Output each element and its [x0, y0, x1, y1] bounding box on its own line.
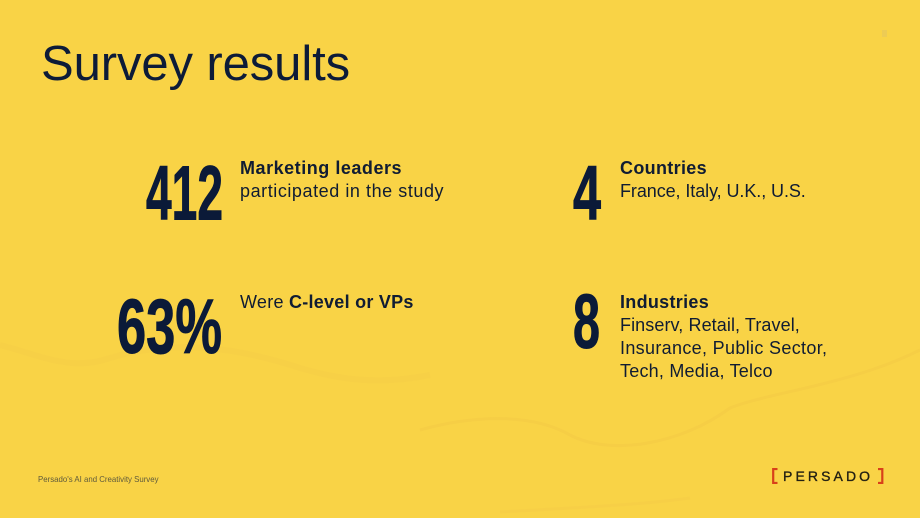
text: C-level or VPs: Were C-level or VPs — [240, 292, 414, 312]
logo bracket left — [772, 468, 778, 484]
text: industries: Tech, Media, Telco — [620, 361, 773, 381]
stat: 412 marketing leaders — [146, 155, 444, 230]
text: countries — [620, 158, 806, 201]
stat: 63% C-level or VPs — [117, 285, 414, 360]
text: industries: Finserv, Retail, Travel, — [620, 315, 800, 335]
footnote: Persado's AI and Creativity Survey — [38, 475, 159, 484]
text: countries: Countries — [620, 158, 707, 178]
stat: 8 industries — [573, 285, 827, 381]
logo bracket right — [878, 468, 884, 484]
logo: Persado — [772, 468, 884, 484]
text: countries: France, Italy, U.K., U.S. — [620, 181, 806, 201]
text: industries: Industries — [620, 292, 709, 312]
stat: 4 countries — [573, 155, 806, 230]
text: marketing leaders: Marketing leaders — [240, 158, 402, 178]
title: Survey results — [41, 37, 350, 91]
text: industries — [620, 292, 827, 381]
text: marketing leaders — [240, 158, 444, 201]
text: marketing leaders: participated in the study — [240, 181, 444, 201]
text: industries: Insurance, Public Sector, — [620, 338, 827, 358]
logo wordmark: PERSADO — [783, 468, 873, 484]
